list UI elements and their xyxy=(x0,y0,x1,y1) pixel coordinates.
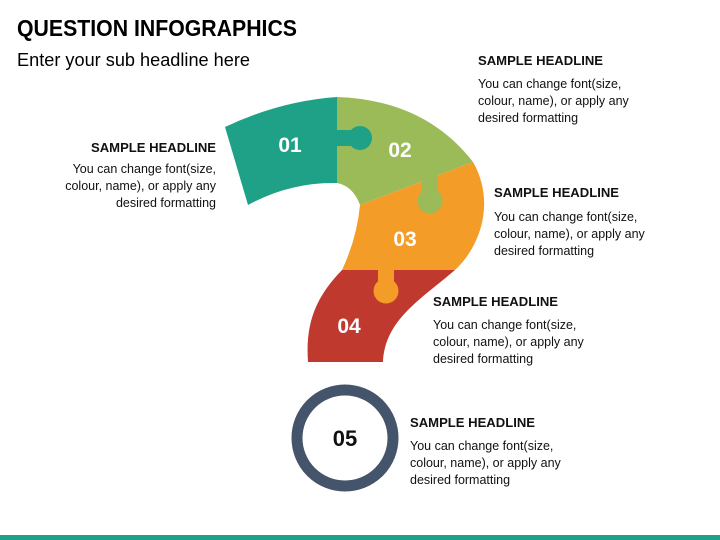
text block 03: You can change font(size, xyxy=(494,210,637,224)
text block 03: colour, name), or apply any xyxy=(494,227,646,241)
text block 01: You can change font(size, xyxy=(73,162,216,176)
piece 04 xyxy=(308,270,455,362)
circle 05 xyxy=(297,390,393,486)
text block 05: You can change font(size, xyxy=(410,439,553,453)
label 03: 03 xyxy=(393,228,417,251)
text block 02 xyxy=(478,53,630,125)
bottom bar xyxy=(0,535,720,540)
text block 05: SAMPLE HEADLINE xyxy=(410,415,535,430)
text block 01: SAMPLE HEADLINE xyxy=(91,140,216,155)
text block 03 xyxy=(494,185,646,258)
piece 02 xyxy=(337,97,473,205)
subtitle: Enter your sub headline here xyxy=(17,50,250,70)
piece 01 xyxy=(225,97,337,205)
text block 01: desired formatting xyxy=(116,196,216,210)
text block 05: desired formatting xyxy=(410,473,510,487)
text block 03: desired formatting xyxy=(494,244,594,258)
text block 05: colour, name), or apply any xyxy=(410,456,562,470)
piece 03 xyxy=(342,162,484,270)
text block 05 xyxy=(410,415,562,487)
text block 02: colour, name), or apply any xyxy=(478,94,630,108)
text block 03: SAMPLE HEADLINE xyxy=(494,185,619,200)
title: QUESTION INFOGRAPHICS xyxy=(17,15,297,41)
text block 04: SAMPLE HEADLINE xyxy=(433,294,558,309)
text block 02: You can change font(size, xyxy=(478,77,621,91)
circle 05: 05 xyxy=(333,426,357,451)
text block 04: colour, name), or apply any xyxy=(433,335,585,349)
label 04: 04 xyxy=(337,315,361,338)
text block 01 xyxy=(65,140,217,210)
text block 02: desired formatting xyxy=(478,111,578,125)
text block 01: colour, name), or apply any xyxy=(65,179,217,193)
text block 04: desired formatting xyxy=(433,352,533,366)
question mark puzzle xyxy=(225,97,484,362)
tab 01 xyxy=(336,126,372,150)
text block 04: You can change font(size, xyxy=(433,318,576,332)
text block 04 xyxy=(433,294,585,366)
tab 02 xyxy=(418,175,442,214)
label 02: 02 xyxy=(388,139,412,162)
tab 03 xyxy=(374,268,398,304)
label 01: 01 xyxy=(278,134,302,157)
text block 02: SAMPLE HEADLINE xyxy=(478,53,603,68)
